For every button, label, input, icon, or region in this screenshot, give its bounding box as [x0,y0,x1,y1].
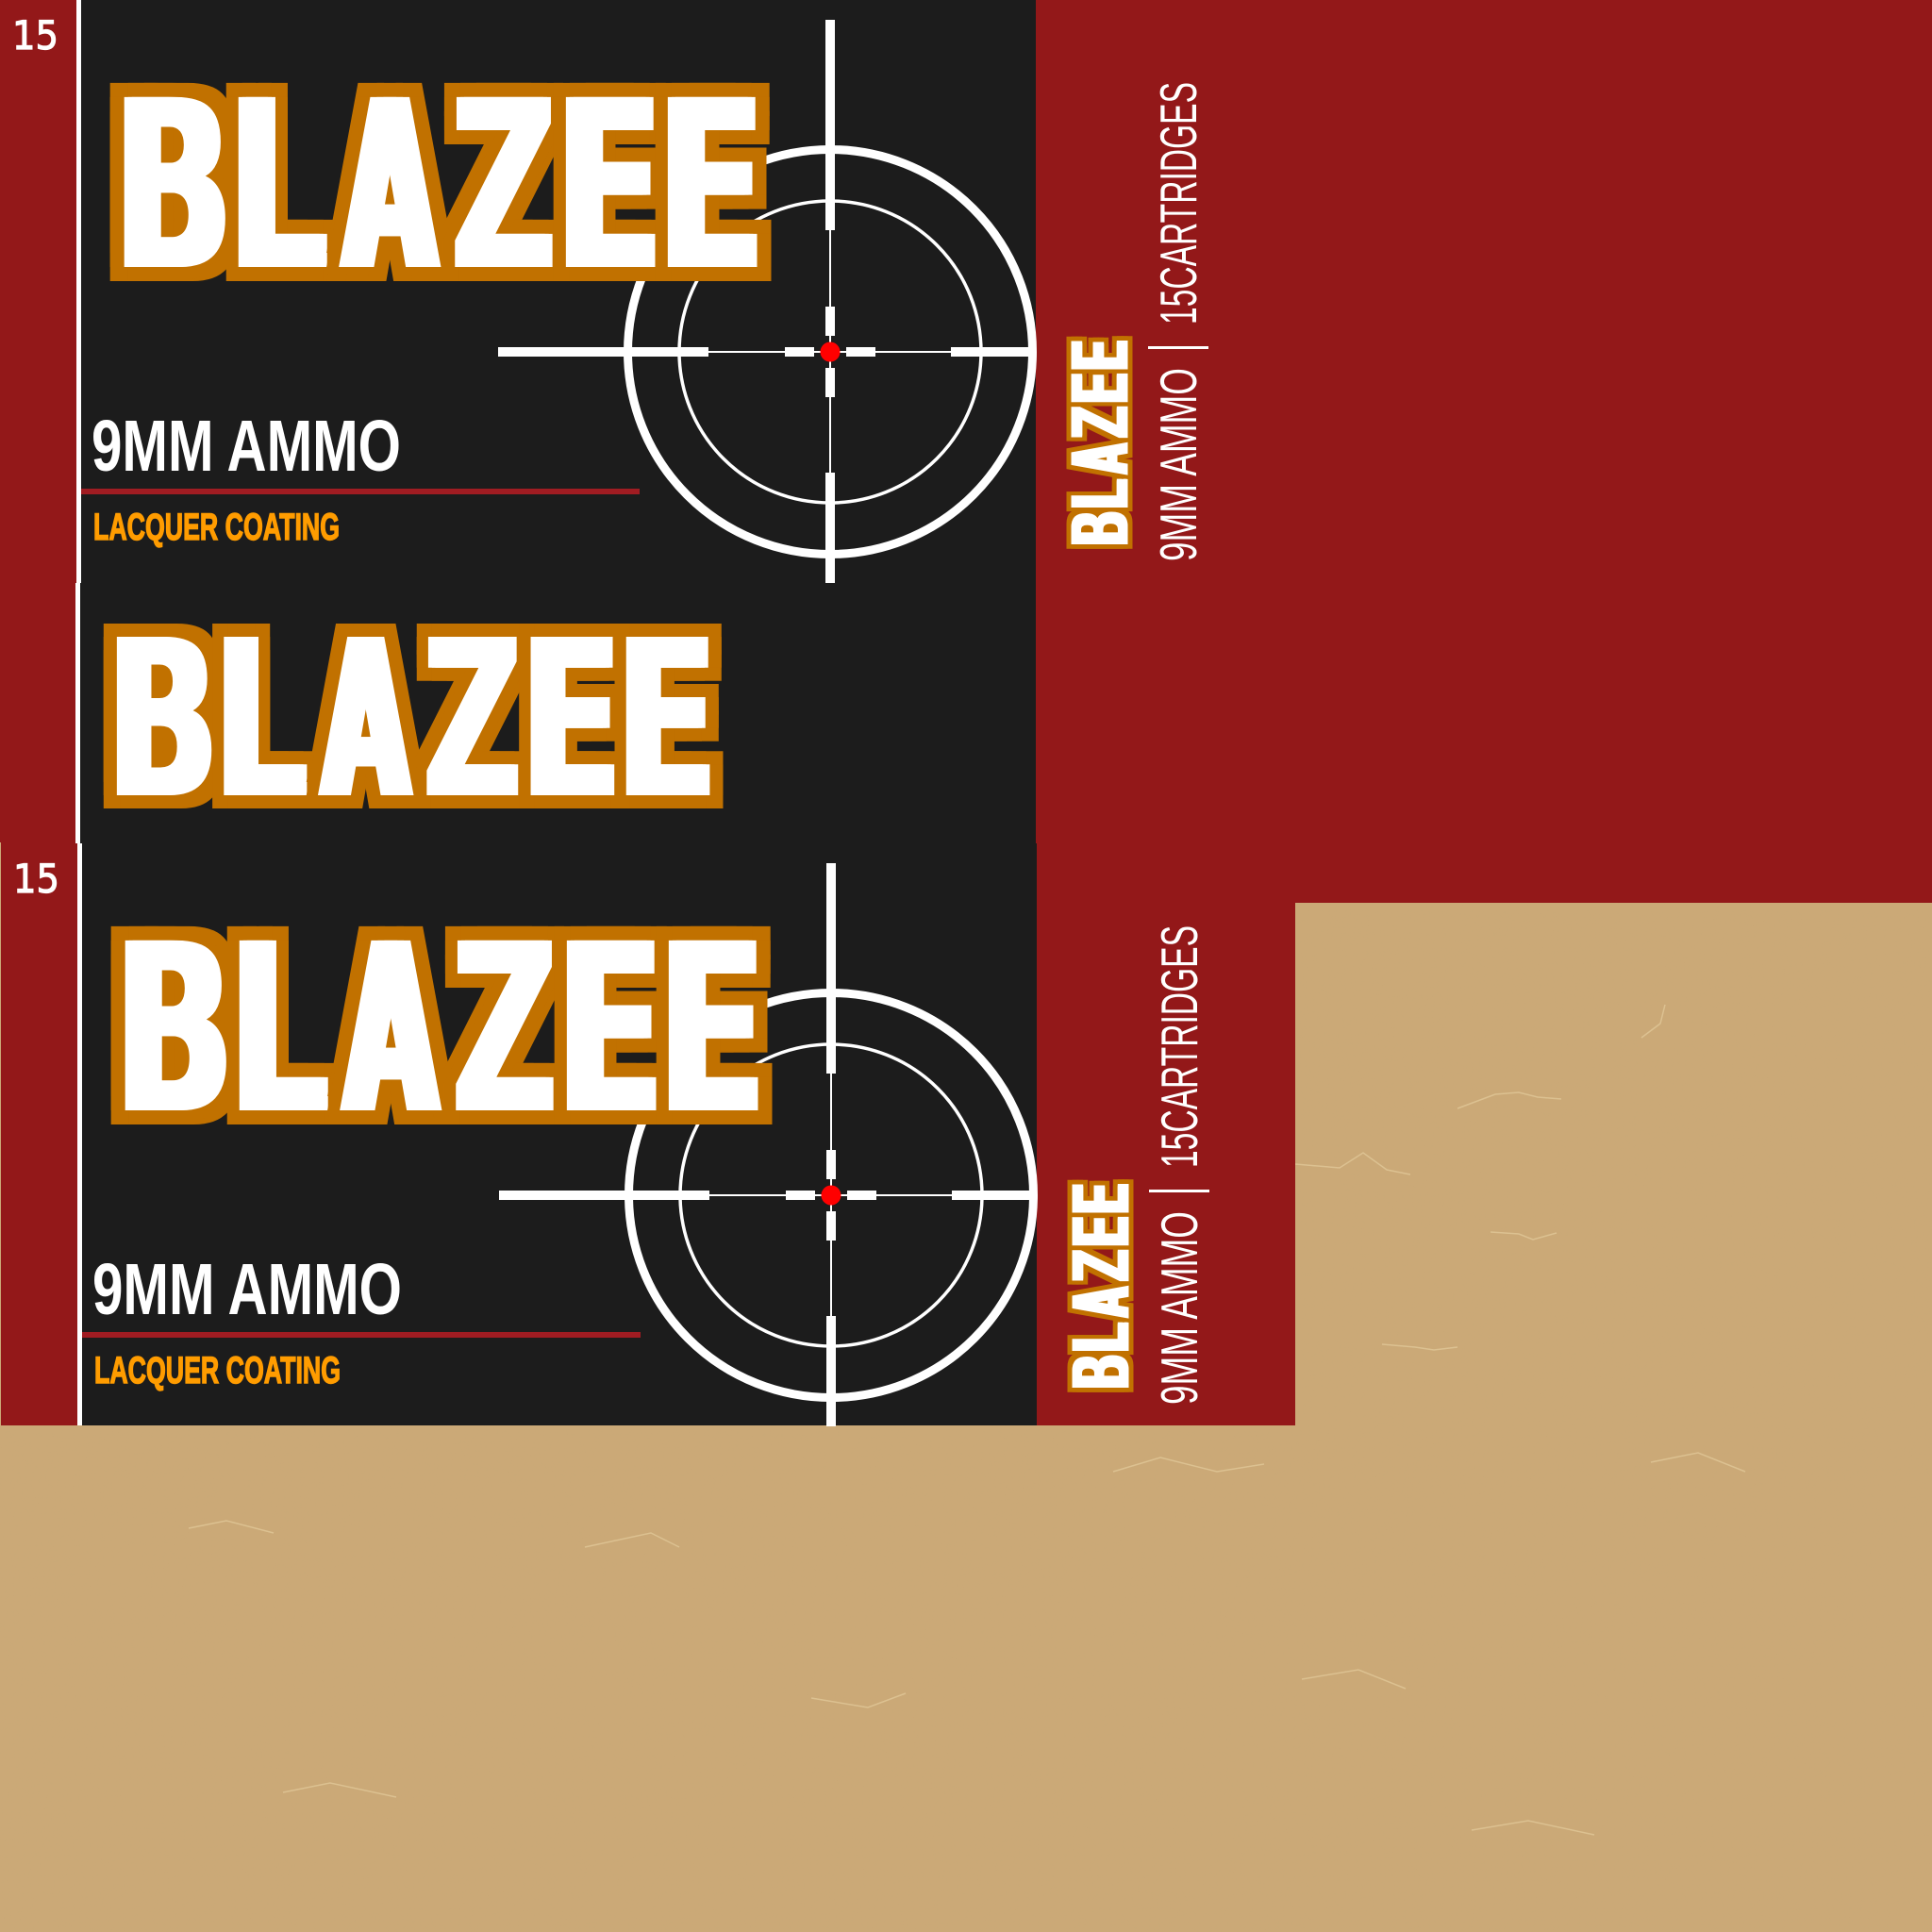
logo: side blazee [1056,336,1146,549]
dark face background [76,0,1036,583]
logo: main blazee [111,894,772,1166]
logo: main blazee: E [557,894,664,1166]
logo: main blazee: B [113,52,232,323]
logo: side blazee: A [1056,444,1146,474]
logo: side blazee: E [1057,1214,1147,1248]
heading: 9mm ammo: 9MM AMMO [92,406,401,487]
panel: top box face [12,0,1208,583]
count label: 15 [12,12,58,58]
heading: 9mm ammo: 9MM AMMO [92,1249,402,1330]
subheading: lacquer coating: LACQUER COATING [93,507,340,548]
red field top [0,0,1932,903]
side text: 9mm ammo: 9MM AMMO [1149,368,1208,561]
logo: main blazee: Z [453,52,556,323]
logo: side blazee: L [1057,1322,1147,1354]
side text: 9mm ammo: 9MM AMMO [1150,1211,1208,1404]
logo: middle flap blazee: Z [425,594,521,847]
logo: main blazee [109,52,772,323]
logo: side blazee: A [1057,1287,1147,1316]
side separator [1149,1189,1209,1192]
subheading: lacquer coating: LACQUER COATING [94,1349,341,1391]
logo: side blazee: E [1056,338,1146,373]
logo: main blazee: Z [454,894,557,1166]
logo: middle flap blazee: A [324,594,408,847]
panel: lower box face [13,843,1209,1426]
logo: side blazee: E [1056,371,1146,406]
logo: main blazee: A [346,894,436,1166]
divider rule [82,1332,641,1338]
reticle and text graphics [12,12,1208,583]
logo: middle flap blazee [104,594,723,847]
logo: side blazee: B [1056,509,1146,548]
logo: side blazee: Z [1056,406,1146,439]
logo: main blazee: L [228,52,328,323]
logo: middle flap blazee: E [616,594,717,847]
dark face background [77,843,1037,1425]
icon: crosshair reticle [499,862,1034,1426]
side separator [1148,346,1208,349]
divider rule [81,489,640,494]
logo: side blazee: Z [1057,1248,1147,1281]
logo: middle flap blazee: E [521,594,622,847]
logo: side blazee: B [1057,1353,1147,1391]
panel: middle flap dark background [75,583,1036,843]
logo: side blazee [1057,1179,1147,1392]
logo: middle flap blazee: L [214,594,308,847]
logo: side blazee: E [1057,1181,1147,1216]
logo: main blazee: E [556,52,663,323]
logo: main blazee: B [114,894,233,1166]
icon: crosshair reticle [498,20,1032,583]
logo: main blazee: A [345,52,435,323]
logo: middle flap blazee: B [107,594,218,847]
logo: side blazee: L [1056,478,1146,510]
count label: 15 [13,855,59,902]
reticle and text graphics [13,855,1209,1426]
logo: main blazee: E [658,52,765,323]
red field lower flap [1,842,1295,1425]
logo: main blazee: L [229,894,329,1166]
logo: main blazee: E [658,894,766,1166]
